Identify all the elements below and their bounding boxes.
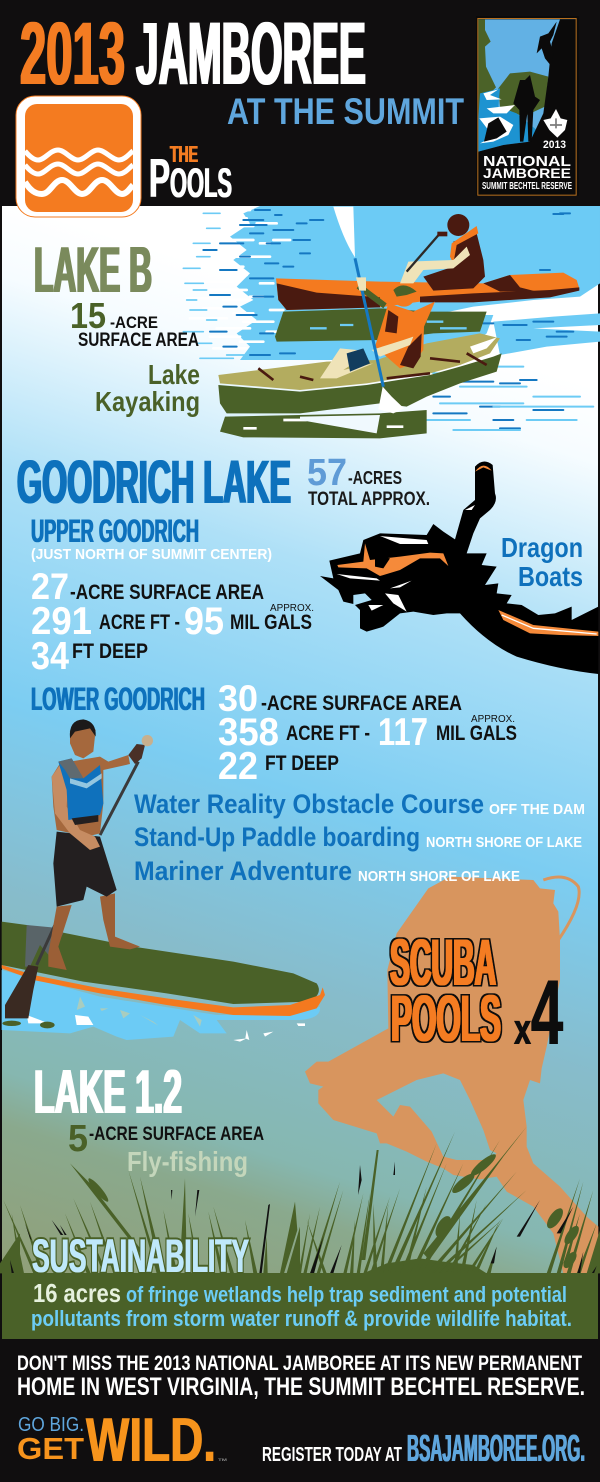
label: pools: P [149, 147, 170, 209]
front kayak lower reflection [220, 410, 427, 438]
upper goodrich stats: 95 [184, 600, 224, 643]
grass left [0, 1163, 300, 1273]
lake b activity: Kayaking [95, 386, 200, 417]
times four: 4 [531, 962, 563, 1064]
label: pools: OOLS [170, 159, 232, 206]
lower goodrich activities: Stand-Up Paddle boarding [134, 822, 420, 852]
lower goodrich stats: ACRE FT - [286, 722, 370, 745]
upper goodrich heading: (JUST NORTH OF SUMMIT CENTER) [31, 546, 272, 563]
scuba diver silhouette [305, 877, 598, 1273]
front kayak hull [218, 353, 502, 413]
upper goodrich stats: 27 [31, 566, 69, 607]
upper goodrich stats: ACRE FT - [99, 611, 180, 634]
register call to action: REGISTER TODAY AT [262, 1444, 402, 1466]
lake 1.2 stats: -ACRE SURFACE AREA [89, 1124, 264, 1145]
lake 1.2 stats: 5 [68, 1118, 88, 1160]
jamboree logo: NATIONAL [483, 153, 571, 170]
text: LAKE B [34, 233, 152, 306]
goodrich total: -ACRES [348, 468, 402, 488]
back paddler [423, 233, 485, 291]
lower goodrich stats: -ACRE SURFACE AREA [261, 692, 462, 715]
sustainability band [2, 1273, 598, 1339]
scuba pools heading [390, 925, 501, 1055]
paddle [333, 207, 355, 257]
dragon boats label [501, 532, 583, 592]
board [2, 922, 319, 1004]
label: pools [149, 147, 232, 209]
lake b acreage: SURFACE AREA [78, 330, 199, 351]
lower goodrich stats: 117 [378, 711, 428, 754]
lake b acreage: -ACRE [110, 313, 158, 332]
lake 1.2 heading: LAKE 1.2 [34, 1058, 182, 1127]
upper goodrich stats [31, 566, 314, 678]
go big get wild logo: GO BIG. [18, 1414, 84, 1436]
lower goodrich activities [134, 789, 585, 886]
lower goodrich activities: NORTH SHORE OF LAKE [358, 868, 520, 885]
lower goodrich stats: APPROX. [471, 714, 515, 725]
life vest [58, 758, 103, 820]
lower goodrich stats: MIL GALS [436, 722, 517, 745]
lake b acreage: 15 [70, 295, 106, 336]
goodrich total: 57 [307, 452, 347, 494]
front kayak deck [218, 333, 500, 390]
torso [52, 755, 130, 837]
goodrich total [307, 452, 430, 510]
upper goodrich stats: -ACRE SURFACE AREA [70, 581, 264, 604]
go big get wild logo: WILD. [86, 1406, 216, 1475]
lower goodrich stats: FT DEEP [265, 752, 339, 775]
lower goodrich stats: 358 [218, 711, 279, 754]
lake b activity [95, 359, 200, 417]
times four: x [514, 1005, 531, 1054]
kayak illustration [183, 206, 600, 438]
lower goodrich activities: Mariner Adventure [134, 856, 352, 886]
sustainability heading: SUSTAINABILITY [32, 1229, 249, 1282]
lake 1.2 stats [68, 1118, 264, 1177]
lower goodrich stats: 22 [218, 745, 258, 788]
jamboree logo: JAMBOREE [483, 165, 571, 181]
lower goodrich stats [218, 678, 517, 788]
shorts [53, 832, 117, 907]
upper goodrich stats: FT DEEP [72, 640, 148, 663]
times four [514, 962, 563, 1064]
back kayak reflection [275, 308, 487, 342]
sky gradient [2, 206, 598, 1276]
lower goodrich activities: OFF THE DAM [489, 801, 585, 818]
dragon boat [320, 462, 598, 674]
goodrich lake heading: GOODRICH LAKE [17, 448, 291, 516]
lake b acreage [70, 295, 199, 351]
lower goodrich stats: 30 [218, 678, 258, 719]
sustainability body [31, 1278, 572, 1331]
goodrich total: TOTAL APPROX. [308, 489, 430, 510]
head [70, 723, 96, 758]
upper goodrich stats: APPROX. [270, 603, 314, 614]
label: the: THE [170, 141, 198, 167]
sustainability body: 16 acres [33, 1278, 121, 1308]
grass right [298, 1127, 600, 1273]
back kayak [276, 273, 579, 310]
header: at the summit: AT THE SUMMIT [227, 91, 464, 132]
dragon boats label: Boats [518, 561, 583, 592]
upper goodrich stats: 291 [31, 600, 92, 643]
lower goodrich activities: Water Reality Obstacle Course [134, 789, 484, 819]
icon: pools [16, 96, 141, 217]
lower goodrich heading: LOWER GOODRICH [31, 681, 205, 717]
upper goodrich stats: MIL GALS [230, 611, 312, 634]
go big get wild logo: GET [17, 1431, 84, 1466]
jamboree logo [476, 16, 579, 196]
fin and paddle [25, 925, 63, 967]
stand-up paddleboarder [2, 719, 325, 1042]
upper goodrich stats: 34 [31, 635, 69, 678]
header: 2013: 2013 [20, 3, 125, 103]
go big get wild logo [17, 1406, 228, 1475]
upper goodrich heading [31, 513, 272, 563]
front paddler [320, 348, 373, 378]
upper goodrich heading: UPPER GOODRICH [31, 513, 199, 549]
go big get wild logo: TM [218, 1457, 228, 1462]
jamboree logo: 2013 [543, 139, 566, 151]
lake 1.2 stats: Fly-fishing [127, 1146, 248, 1177]
lake b activity: Lake [148, 359, 200, 390]
footer message [17, 1352, 585, 1401]
dragon boats label: Dragon [501, 532, 583, 563]
register call to action [262, 1428, 585, 1470]
legs [48, 905, 72, 970]
arm glove [128, 744, 145, 764]
